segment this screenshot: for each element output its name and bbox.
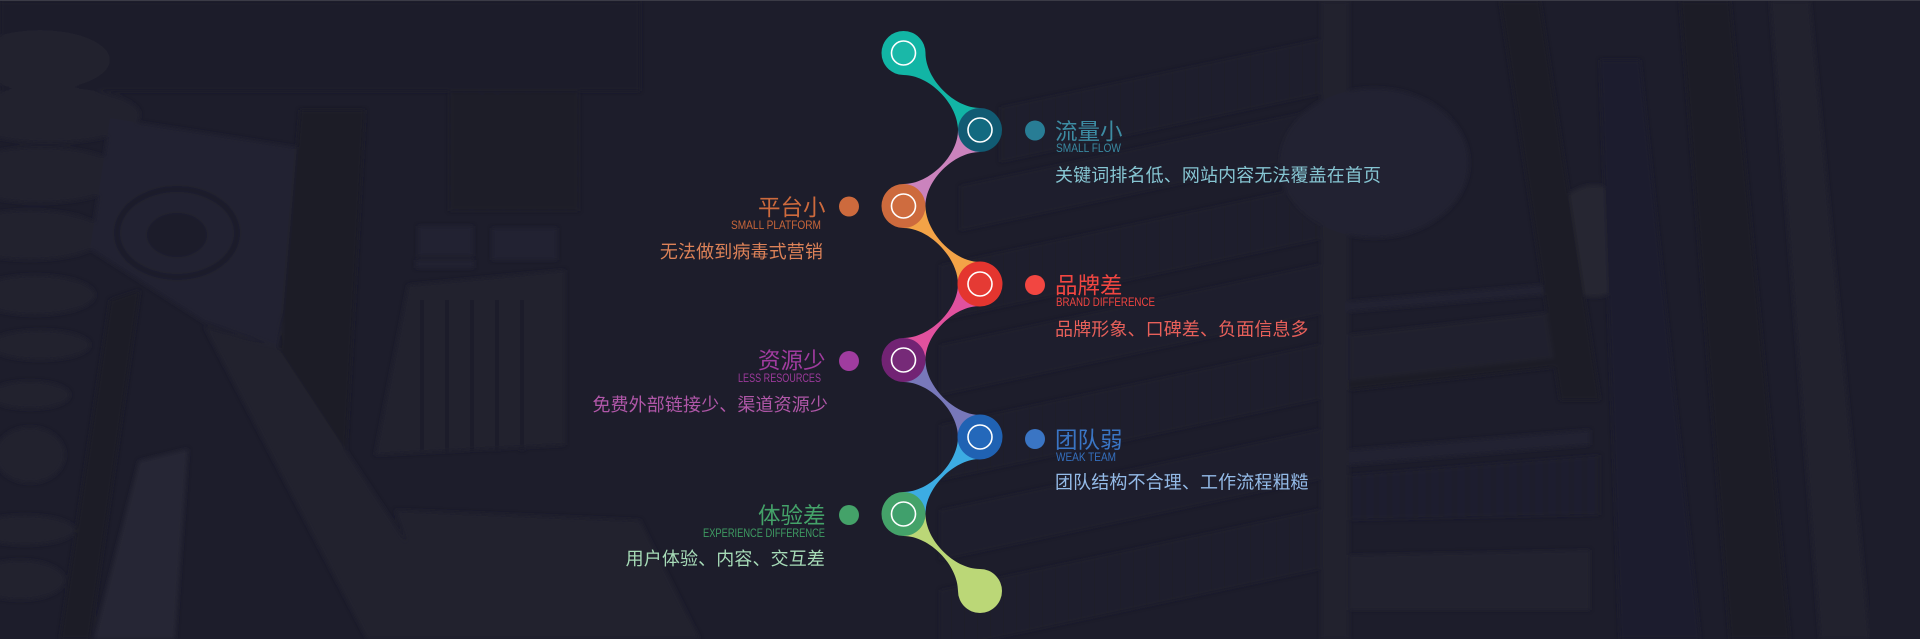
- heading: 体验差: [758, 504, 826, 528]
- item: weak team: [1025, 428, 1309, 492]
- description: 用户体验、内容、交互差: [626, 549, 825, 569]
- connector: magenta: [904, 284, 980, 360]
- node: end lime: [958, 569, 1002, 613]
- subheading: LESS RESOURCES: [738, 373, 821, 385]
- heading: 团队弱: [1055, 428, 1123, 453]
- node: weak team: [958, 414, 1002, 460]
- dot: [839, 351, 859, 371]
- node: small platform: [882, 184, 926, 228]
- dot: [1025, 429, 1045, 449]
- dot: [1025, 120, 1045, 140]
- subheading: SMALL PLATFORM: [731, 220, 821, 232]
- bookshelves right: [1321, 1, 1349, 639]
- connector: sky blue: [904, 437, 980, 514]
- item: experience difference: [626, 504, 859, 569]
- heading: 品牌差: [1055, 274, 1123, 298]
- connector: pink: [904, 130, 980, 206]
- subheading: BRAND DIFFERENCE: [1056, 297, 1155, 309]
- description: 免费外部链接少、渠道资源少: [592, 395, 828, 415]
- description: 团队结构不合理、工作流程粗糙: [1055, 472, 1309, 492]
- connector chain: [882, 31, 1002, 613]
- description: 品牌形象、口碑差、负面信息多: [1055, 320, 1309, 340]
- item: brand difference: [1025, 274, 1309, 340]
- connector: lime: [904, 514, 980, 591]
- dot: [839, 196, 859, 216]
- description: 关键词排名低、网站内容无法覆盖在首页: [1055, 166, 1381, 186]
- heading: 流量小: [1055, 120, 1123, 144]
- connector: teal: [904, 53, 980, 130]
- heading: 平台小: [758, 196, 826, 220]
- node: start teal: [882, 31, 926, 75]
- subheading: WEAK TEAM: [1056, 452, 1116, 464]
- node: experience difference: [882, 492, 926, 536]
- subheading: EXPERIENCE DIFFERENCE: [703, 528, 825, 540]
- connector: periwinkle: [904, 360, 980, 437]
- item: less resources: [592, 348, 859, 415]
- node: brand difference: [958, 262, 1002, 306]
- node: small flow: [958, 108, 1002, 152]
- subheading: SMALL FLOW: [1056, 143, 1121, 155]
- heading: 资源少: [758, 348, 826, 374]
- bookshelves centre: [940, 39, 1320, 639]
- dot: [839, 505, 859, 525]
- connector: orange: [904, 206, 980, 284]
- node: less resources: [882, 338, 926, 382]
- item: small flow: [1025, 120, 1381, 186]
- dot: [1025, 275, 1045, 295]
- description: 无法做到病毒式营销: [660, 242, 823, 262]
- item: small platform: [660, 196, 859, 262]
